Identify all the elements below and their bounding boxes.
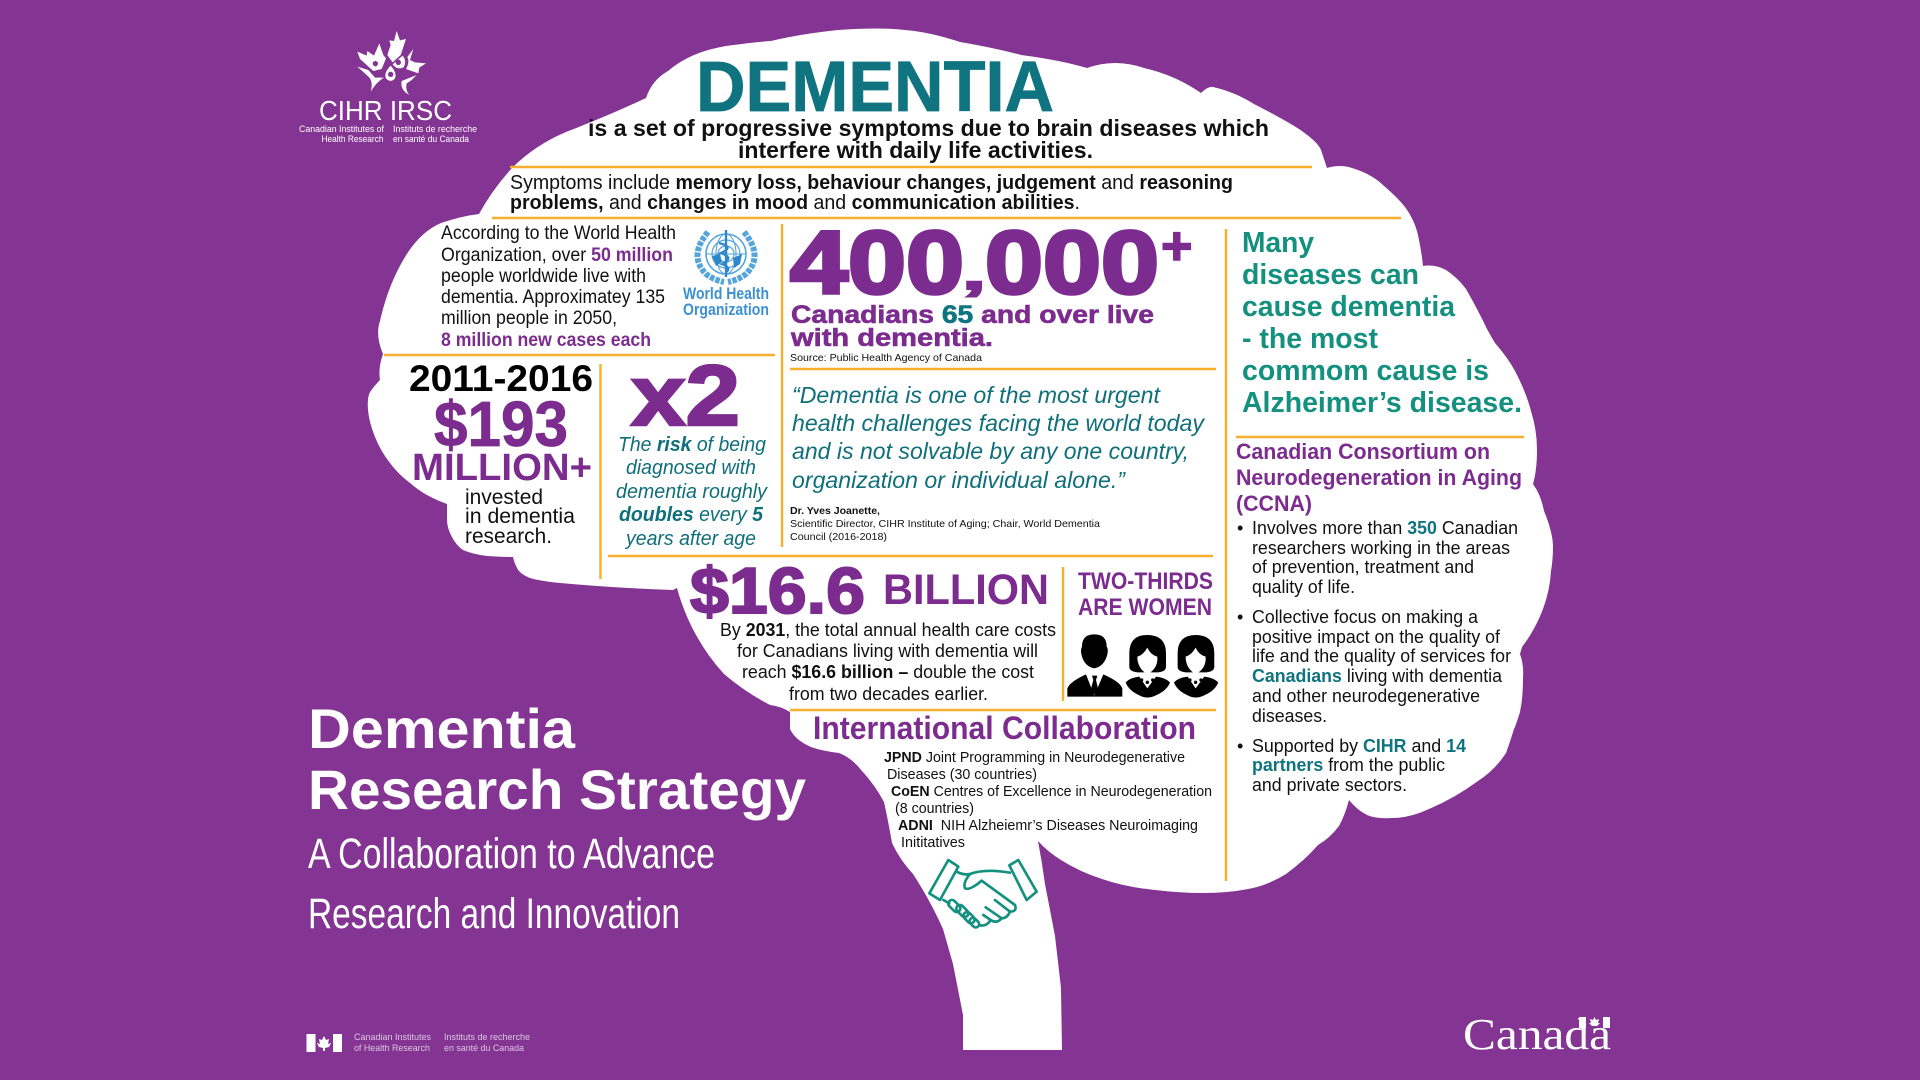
icon: handshake [929, 860, 1037, 929]
logo: Canada flag signature: Canadian Institutes [354, 1032, 431, 1043]
stat: 2011-2016 $193 million invested [409, 358, 593, 548]
logo: CIHR maple leaf [357, 31, 426, 95]
stat caption: Canadians 65 and over: with dementia. [790, 324, 993, 352]
logo: CIHR IRSC wordmark: CIHR IRSC [319, 95, 452, 126]
stat: $16.6 billion: BILLION [883, 566, 1049, 614]
CCNA bullet list: • [1237, 607, 1243, 627]
collaboration list: Diseases (30 countries) [887, 767, 1037, 783]
left subtitle [308, 830, 715, 938]
quote: health challenges facing the world today [792, 410, 1205, 436]
quote attribution: Council (2016-2018) [790, 531, 887, 543]
risk description: doubles every 5 [619, 504, 764, 526]
callout: many diseases can cause dementia: Alzheimer’s disease. [1242, 387, 1522, 419]
CCNA bullet list: Collective focus on making a [1252, 607, 1479, 627]
definition text [588, 115, 1269, 163]
stat: x2 risk: x2 [631, 349, 740, 444]
CCNA bullet list: diseases. [1252, 706, 1327, 726]
title: DEMENTIA: DEMENTIA [696, 48, 1054, 127]
heading: two-thirds are women: TWO-THIRDS [1078, 568, 1213, 595]
logo: CIHR IRSC wordmark: Health Research [322, 134, 384, 145]
CCNA bullet list: • [1237, 518, 1243, 538]
symptoms text: problems, and changes in mood and communication abilities. [510, 192, 1080, 214]
heading: CCNA: Canadian Consortium on [1236, 439, 1490, 464]
quote: organization or individual alone.” [792, 467, 1126, 493]
WHO statistics text: According to the World Health [441, 223, 676, 244]
logo: Canada flag signature: Instituts de recherche [444, 1032, 530, 1043]
heading: CCNA: Neurodegeneration in Aging [1236, 465, 1522, 490]
stat: 400,000+: 400 [790, 212, 964, 312]
callout: many diseases can cause dementia [1242, 227, 1522, 419]
WHO statistics text: million people in 2050, [441, 308, 617, 329]
quote [792, 382, 1205, 493]
heading: CCNA: (CCNA) [1236, 491, 1312, 516]
symptoms text [510, 172, 1233, 214]
icon: woman [1126, 635, 1170, 697]
CCNA bullet list: Supported by CIHR and 14 [1252, 736, 1466, 756]
CCNA bullet list: and private sectors. [1252, 775, 1407, 795]
risk description: The risk of being [618, 434, 766, 456]
brain silhouette [368, 28, 1553, 1050]
left title: Dementia Research Strategy: Research Strategy [308, 758, 806, 821]
WHO wordmark: Organization [683, 300, 769, 319]
collaboration list: (8 countries) [895, 801, 974, 817]
CCNA bullet list: and other neurodegenerative [1252, 686, 1480, 706]
stat: $16.6 billion: $16.6 [690, 554, 865, 627]
WHO statistics text: Organization, over 50 million [441, 245, 673, 266]
heading: two-thirds are women: ARE WOMEN [1078, 594, 1212, 621]
symptoms text: Symptoms include memory loss, behaviour changes, judgement and reasoning [510, 172, 1233, 194]
logo: Canada flag signature: en santé du Canada [444, 1043, 525, 1054]
stat caption: Canadians 65 and over: Canadians 65 and over live [791, 301, 1154, 329]
collaboration list: JPND Joint Programming in Neurodegenerative [884, 750, 1185, 766]
risk description: dementia roughly [616, 481, 768, 503]
stat: 2011-2016 $193 million invested: in dementia [465, 504, 575, 528]
collaboration list: Inititatives [901, 835, 965, 851]
collaboration list: ADNI NIH Alzheiemr’s Diseases Neuroimaging [898, 818, 1198, 834]
logo: CIHR IRSC wordmark [299, 95, 477, 145]
stat: 2011-2016 $193 million invested: 2011-2016 [409, 358, 593, 399]
left title: Dementia Research Strategy [308, 697, 806, 821]
health care cost text [720, 619, 1056, 704]
stat: 400,000+: + [1161, 216, 1193, 276]
stat caption: Canadians 65 and over [790, 301, 1154, 352]
left subtitle: Research and Innovation [308, 890, 680, 938]
quote attribution: Scientific Director, CIHR Institute of Aging; Chair, World Dementia [790, 518, 1100, 530]
health care cost text: from two decades earlier. [789, 683, 988, 704]
heading: two-thirds are women [1078, 568, 1213, 621]
callout: many diseases can cause dementia: commom cause is [1242, 355, 1489, 387]
callout: many diseases can cause dementia: Many [1242, 227, 1314, 259]
CCNA bullet list: life and the quality of services for [1252, 646, 1511, 666]
collaboration list: CoEN Centres of Excellence in Neurodegeneration [891, 784, 1212, 800]
callout: many diseases can cause dementia: cause dementia [1242, 291, 1456, 323]
CCNA bullet list: Canadians living with dementia [1252, 666, 1503, 686]
divider rules [384, 167, 1524, 881]
CCNA bullet list: of prevention, treatment and [1252, 557, 1474, 577]
source note: Source: Public Health Agency of Canada [790, 352, 982, 364]
quote: and is not solvable by any one country, [792, 438, 1189, 464]
stat: 400,000+ [790, 212, 1193, 312]
CCNA bullet list [1237, 518, 1518, 795]
health care cost text: for Canadians living with dementia will [737, 640, 1038, 661]
logo: CIHR IRSC wordmark: Canadian Institutes of [299, 124, 384, 135]
risk description: diagnosed with [626, 457, 756, 479]
logo: Canada flag signature: of Health Research [354, 1043, 430, 1054]
CCNA bullet list: Involves more than 350 Canadian [1252, 518, 1518, 538]
WHO wordmark: World Health [683, 284, 769, 303]
health care cost text: By 2031, the total annual health care costs [720, 619, 1056, 640]
WHO statistics text [441, 223, 676, 351]
logo: Canada wordmark: Canada [1463, 1010, 1611, 1059]
heading: International Collaboration: International Collaboration [813, 710, 1196, 746]
WHO wordmark [683, 284, 769, 319]
definition text: interfere with daily life activities. [738, 137, 1093, 163]
stat: 400,000+: 000 [985, 212, 1159, 312]
quote: “Dementia is one of the most urgent [792, 382, 1161, 408]
stat: 2011-2016 $193 million invested: invested [465, 485, 543, 509]
collaboration list [884, 750, 1212, 851]
CCNA bullet list: positive impact on the quality of [1252, 627, 1501, 647]
callout: many diseases can cause dementia: - the most [1242, 323, 1379, 355]
logo: CIHR IRSC wordmark: en santé du Canada [393, 134, 470, 145]
CCNA bullet list: • [1237, 736, 1243, 756]
WHO statistics text: people worldwide live with [441, 266, 646, 287]
icon: second woman [1174, 635, 1218, 697]
stat: 2011-2016 $193 million invested: research. [465, 524, 552, 548]
risk description: years after age [624, 528, 756, 550]
quote attribution [790, 505, 1100, 543]
left title: Dementia Research Strategy: Dementia [308, 697, 576, 760]
stat: 2011-2016 $193 million invested: $193 [434, 388, 568, 460]
quote attribution: Dr. Yves Joanette, [790, 505, 880, 517]
icon: man [1067, 634, 1122, 697]
left subtitle: A Collaboration to Advance [308, 830, 715, 878]
CCNA bullet list: quality of life. [1252, 577, 1355, 597]
CCNA bullet list: researchers working in the areas [1252, 538, 1510, 558]
callout: many diseases can cause dementia: diseases can [1242, 259, 1419, 291]
definition text: is a set of progressive symptoms due to brain diseases which [588, 115, 1269, 141]
stat: $16.6 billion [690, 554, 1049, 627]
WHO statistics text: dementia. Approximatey 135 [441, 287, 665, 308]
WHO statistics text: 8 million new cases each [441, 330, 651, 351]
stat: 400,000+: , [962, 247, 986, 300]
logo: Canada flag signature [306, 1032, 530, 1054]
icon: World Health Organization emblem [697, 230, 755, 283]
logo: CIHR IRSC wordmark: Instituts de recherche [393, 124, 477, 135]
risk description [616, 434, 768, 550]
health care cost text: reach $16.6 billion – double the cost [742, 661, 1034, 682]
CCNA bullet list: partners from the public [1252, 755, 1445, 775]
stat: 2011-2016 $193 million invested: MILLION+ [412, 447, 592, 489]
heading: CCNA [1236, 439, 1522, 516]
